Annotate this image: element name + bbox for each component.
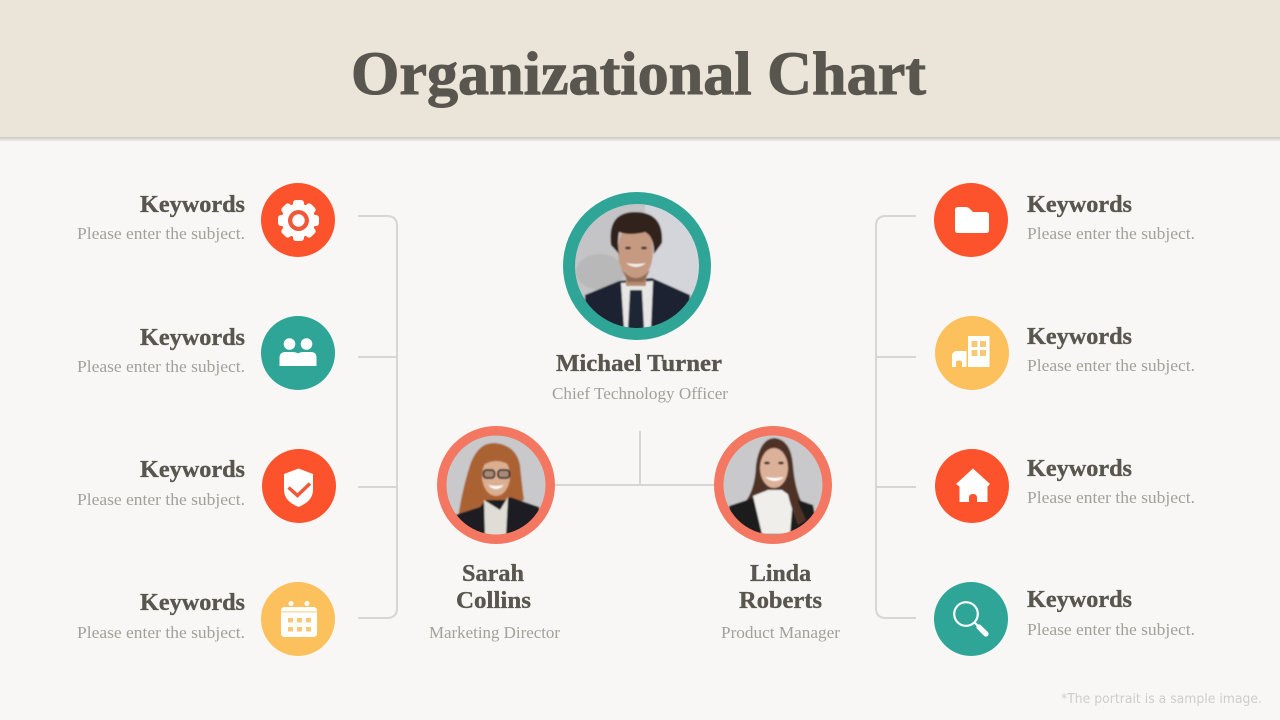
label: keywords left 1: Keywords [140, 192, 245, 218]
icon: calendar [261, 582, 335, 656]
centre connector [555, 431, 714, 485]
panel: right item 2 [935, 316, 1195, 390]
panel: right item 4 [934, 582, 1195, 656]
panel: left item 2 [77, 316, 335, 390]
role: Product Manager: Product Manager [721, 623, 841, 642]
name: Sarah Collins: Sarah [462, 561, 524, 587]
right bracket connector [876, 216, 916, 618]
left bracket connector [358, 216, 397, 618]
label: keywords right 4: Keywords [1027, 587, 1132, 613]
subject left 1: Please enter the subject. [77, 224, 245, 243]
subject right 1: Please enter the subject. [1027, 224, 1195, 243]
icon: people [261, 316, 335, 390]
subject right 2: Please enter the subject. [1027, 356, 1195, 375]
subject left 2: Please enter the subject. [77, 357, 245, 376]
role: CTO: Chief Technology Officer [552, 384, 729, 403]
label: keywords right 3: Keywords [1027, 456, 1132, 482]
icon: buildings [935, 316, 1009, 390]
subject right 3: Please enter the subject. [1027, 488, 1195, 507]
name: Michael Turner: Michael Turner [556, 351, 722, 377]
icon: magnifier [934, 582, 1008, 656]
panel: left item 1 [77, 183, 335, 257]
footnote: *The portrait is a sample image. [1061, 691, 1262, 707]
subject left 3: Please enter the subject. [77, 490, 245, 509]
name: Linda Roberts: Roberts [739, 588, 822, 614]
portrait: Linda Roberts [714, 426, 832, 544]
icon: gear [261, 183, 335, 257]
name: Sarah Collins: Collins [456, 588, 531, 614]
portrait: Sarah Collins [437, 426, 555, 544]
label: keywords right 2: Keywords [1027, 324, 1132, 350]
icon: shield [262, 449, 336, 523]
panel: right item 3 [935, 449, 1195, 523]
label: keywords left 3: Keywords [140, 457, 245, 483]
panel: right item 1 [934, 183, 1195, 257]
panel: left item 3 [77, 449, 336, 523]
panel: left item 4 [77, 582, 335, 656]
icon: folder [934, 183, 1008, 257]
name: Linda Roberts: Linda [750, 561, 811, 587]
portrait: Michael Turner [563, 192, 711, 340]
name: Sarah Collins [456, 561, 531, 614]
title: Organizational Chart [351, 41, 927, 108]
subject right 4: Please enter the subject. [1027, 620, 1195, 639]
header band [0, 0, 1280, 142]
label: keywords right 1: Keywords [1027, 192, 1132, 218]
name: Linda Roberts [739, 561, 822, 614]
label: keywords left 2: Keywords [140, 325, 245, 351]
icon: house [935, 449, 1009, 523]
role: Marketing Director: Marketing Director [429, 623, 561, 642]
label: keywords left 4: Keywords [140, 590, 245, 616]
subject left 4: Please enter the subject. [77, 623, 245, 642]
